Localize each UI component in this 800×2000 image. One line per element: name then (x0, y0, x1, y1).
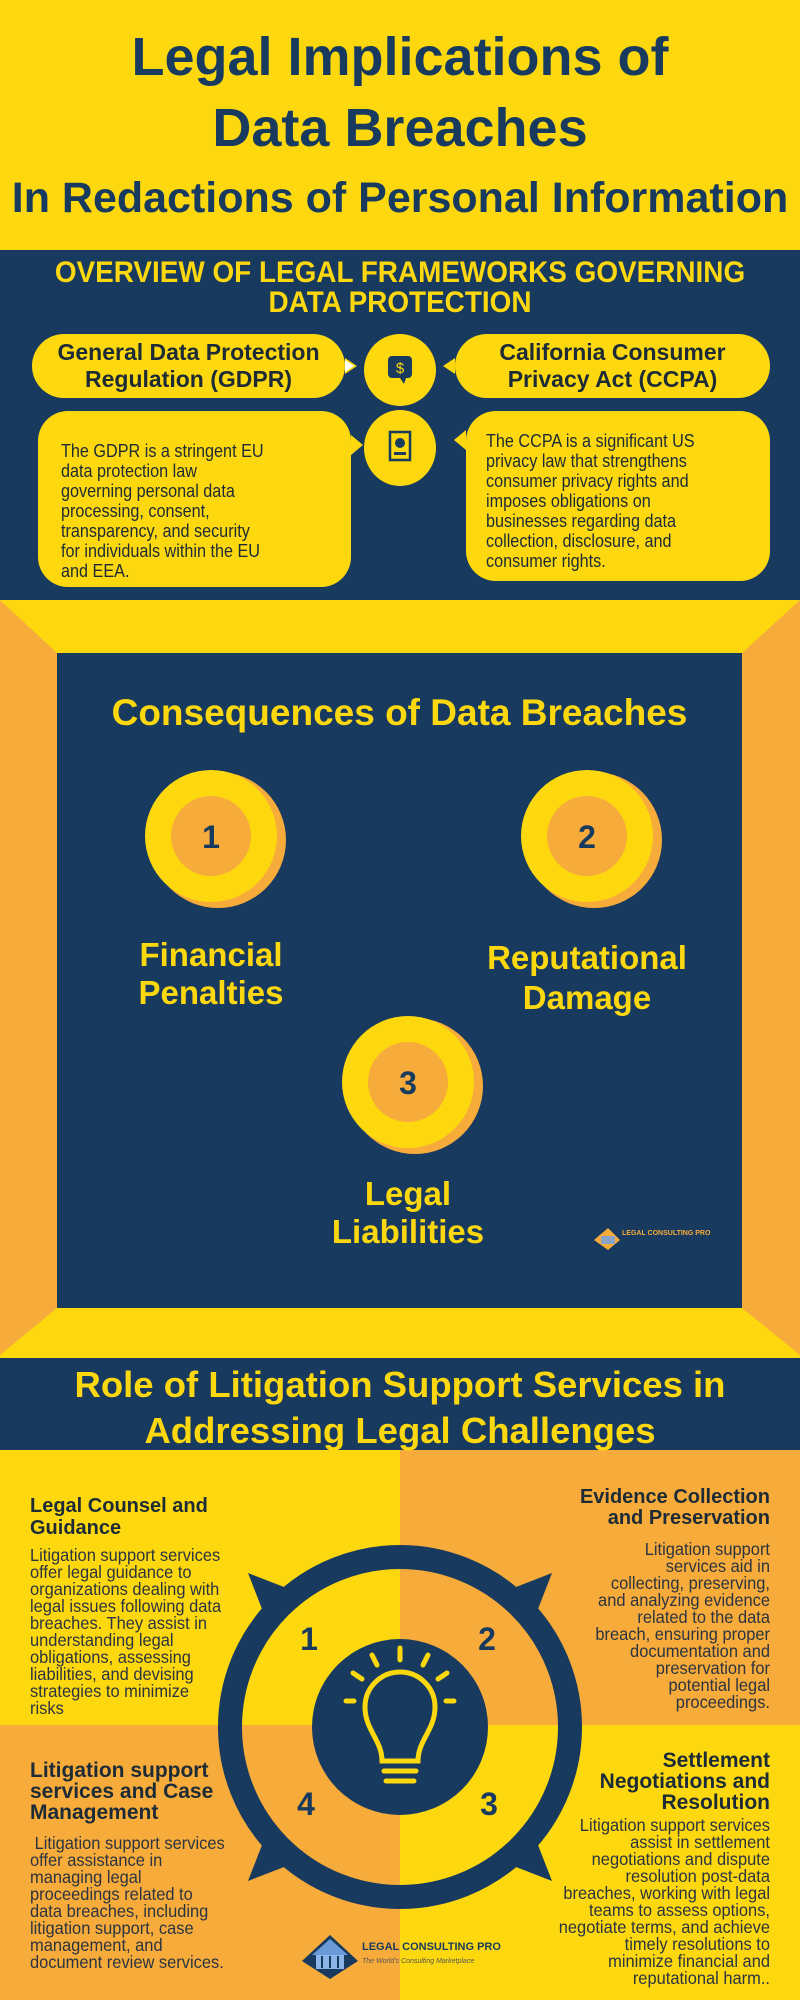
item 1: 1 (202, 819, 220, 855)
ring diagram: 3 (480, 1786, 498, 1822)
block 3 (559, 1749, 770, 1988)
item 3 (332, 1016, 484, 1250)
logo: LEGAL CONSULTING PRO (362, 1941, 501, 1953)
logo: The World's Consulting Marketplace (362, 1958, 474, 1965)
overview heading: DATA PROTECTION (269, 286, 531, 319)
heading: role (74, 1364, 725, 1451)
block 3: assist in settlement (630, 1832, 770, 1852)
icon: money chat (364, 334, 436, 406)
icon: money chat: $ (396, 360, 405, 377)
item 3: Liabilities (332, 1213, 484, 1250)
block 1: understanding legal (30, 1630, 174, 1650)
pill: CCPA (455, 334, 770, 398)
item 1: Financial (139, 936, 283, 973)
item 1: Penalties (139, 974, 283, 1011)
block 4 (30, 1759, 225, 1972)
icon: document alert (364, 410, 436, 486)
panel: overview (0, 250, 800, 600)
overview heading (55, 256, 745, 319)
item 2: Damage (523, 979, 651, 1016)
block 4: Litigation support services (35, 1833, 225, 1853)
block 1: breaches. They assist in (30, 1613, 207, 1633)
block 2: related to the data (637, 1607, 770, 1627)
block 4: proceedings related to (30, 1884, 193, 1904)
item 2 (487, 770, 687, 1016)
ring diagram: 4 (297, 1786, 315, 1822)
block 2: and Preservation (608, 1507, 770, 1529)
panel: consequences frame (0, 600, 800, 1355)
block 2: documentation and (630, 1641, 770, 1661)
block 3: Settlement (663, 1749, 770, 1772)
text: CCPA description: The CCPA is a significant US (486, 431, 695, 451)
block 3: Litigation support services (580, 1815, 770, 1835)
text: GDPR description: governing personal data (61, 481, 235, 501)
block 3: minimize financial and (608, 1951, 770, 1971)
logo small (594, 1228, 710, 1250)
ring diagram: 2 (478, 1621, 496, 1657)
block 1: liabilities, and devising (30, 1664, 194, 1684)
block 4: managing legal (30, 1867, 142, 1887)
item 2: Reputational (487, 939, 687, 976)
logo (302, 1935, 501, 1979)
text: GDPR description (38, 411, 351, 587)
pill: CCPA: California Consumer (499, 339, 726, 365)
block 1: risks (30, 1698, 64, 1718)
block 2: preservation for (656, 1658, 770, 1678)
text: GDPR description: and EEA. (61, 561, 129, 581)
text: CCPA description: collection, disclosure, and (486, 531, 672, 551)
block 1: obligations, assessing (30, 1647, 191, 1667)
block 1 (30, 1495, 222, 1718)
block 3: breaches, working with legal (563, 1883, 770, 1903)
pill: CCPA: Privacy Act (CCPA) (508, 366, 717, 392)
block 1: Guidance (30, 1517, 121, 1539)
ring diagram (218, 1545, 582, 1909)
item 3: 3 (399, 1065, 417, 1101)
overview heading: OVERVIEW OF LEGAL FRAMEWORKS GOVERNING (55, 256, 745, 289)
text: CCPA description: consumer privacy rights and (486, 471, 689, 491)
block 1: organizations dealing with (30, 1579, 219, 1599)
block 3: negotiations and dispute (592, 1849, 770, 1869)
pill: GDPR: Regulation (GDPR) (85, 366, 292, 392)
ring diagram: 1 (300, 1621, 318, 1657)
text: GDPR description: The GDPR is a stringent EU (61, 441, 264, 461)
block 1: Litigation support services (30, 1545, 220, 1565)
text: CCPA description (466, 411, 770, 581)
block 4: services and Case (30, 1780, 213, 1803)
pill: GDPR: General Data Protection (57, 339, 320, 365)
arrows (345, 358, 466, 455)
title: In Redactions of Personal Information (12, 174, 788, 222)
block 4: litigation support, case (30, 1918, 194, 1938)
block 2: Evidence Collection (580, 1486, 770, 1508)
block 2: breach, ensuring proper (595, 1624, 770, 1644)
block 1: Legal Counsel and (30, 1495, 208, 1517)
title (12, 27, 788, 222)
block 4: offer assistance in (30, 1850, 162, 1870)
pill: GDPR (32, 334, 345, 398)
text: GDPR description: transparency, and security (61, 521, 250, 541)
block 3: teams to assess options, (589, 1900, 770, 1920)
text: GDPR description: data protection law (61, 461, 197, 481)
title: Legal Implications of (131, 27, 669, 87)
block 2: services aid in (666, 1556, 770, 1576)
block 4: management, and (30, 1935, 163, 1955)
text: GDPR description: for individuals within the EU (61, 541, 260, 561)
block 3: Resolution (662, 1791, 770, 1814)
block 2 (580, 1486, 770, 1712)
text: CCPA description: businesses regarding data (486, 511, 676, 531)
item 2: 2 (578, 819, 596, 855)
block 2: potential legal (668, 1675, 770, 1695)
item 3: Legal (365, 1175, 451, 1212)
block 4: data breaches, including (30, 1901, 208, 1921)
block 3: timely resolutions to (625, 1934, 770, 1954)
block 4: Litigation support (30, 1759, 208, 1782)
block 3: Negotiations and (600, 1770, 770, 1793)
heading: role: Addressing Legal Challenges (144, 1410, 656, 1451)
text: CCPA description: privacy law that strengthens (486, 451, 687, 471)
block 4: document review services. (30, 1952, 224, 1972)
block 1: legal issues following data (30, 1596, 221, 1616)
block 3: negotiate terms, and achieve (559, 1917, 770, 1937)
block 1: strategies to minimize (30, 1681, 189, 1701)
block 1: offer legal guidance to (30, 1562, 192, 1582)
text: CCPA description: consumer rights. (486, 551, 606, 571)
text: GDPR description: processing, consent, (61, 501, 210, 521)
title: Data Breaches (212, 98, 588, 158)
block 2: proceedings. (676, 1692, 770, 1712)
item 1 (139, 770, 286, 1011)
icon: lightbulb (346, 1648, 454, 1781)
text: CCPA description: imposes obligations on (486, 491, 651, 511)
block 3: resolution post-data (626, 1866, 770, 1886)
block 4: Management (30, 1801, 158, 1824)
heading: role: Role of Litigation Support Services in (74, 1364, 725, 1405)
logo small: LEGAL CONSULTING PRO (622, 1230, 710, 1237)
heading: consequences: Consequences of Data Breaches (112, 692, 687, 733)
block 2: collecting, preserving, (611, 1573, 770, 1593)
block 3: reputational harm.. (633, 1968, 770, 1988)
block 2: and analyzing evidence (598, 1590, 770, 1610)
panel: litigation support (0, 1358, 800, 2000)
block 2: Litigation support (645, 1539, 770, 1559)
